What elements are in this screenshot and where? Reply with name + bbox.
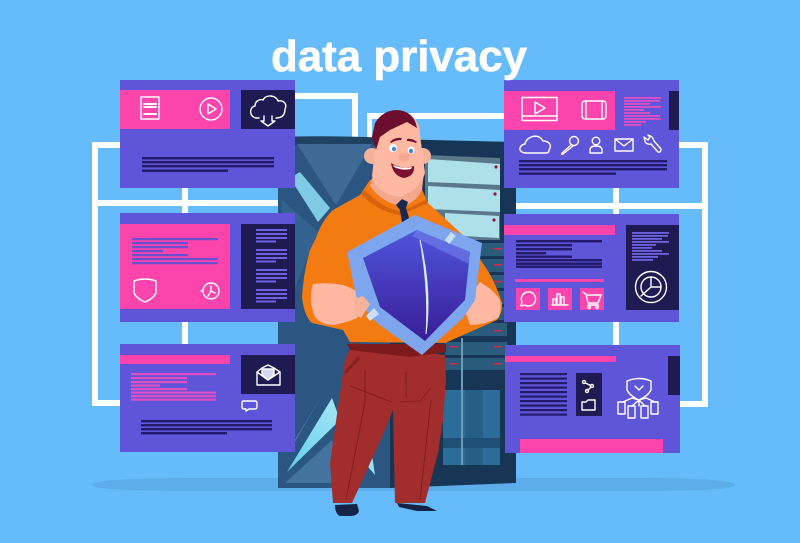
tie <box>396 199 409 223</box>
neck and jaw shadow <box>370 172 424 206</box>
icon tile: bar chart <box>548 288 572 310</box>
ground shadow <box>92 478 735 491</box>
left hand <box>311 283 368 325</box>
text lines dark <box>141 420 272 434</box>
man holding shield <box>302 110 502 516</box>
right hand <box>463 282 501 325</box>
text lines on dark <box>256 229 287 302</box>
text lines pink <box>131 373 216 401</box>
icon: shield <box>134 279 156 302</box>
thumb <box>354 296 370 318</box>
panel: cloud download <box>120 80 295 188</box>
icon: cloud download <box>251 96 286 126</box>
trousers <box>330 343 446 503</box>
icon: wrench <box>644 135 661 152</box>
text lines <box>142 157 274 172</box>
text lines on pink <box>132 238 218 264</box>
text lines pink <box>624 97 661 126</box>
icon: magnifier <box>562 136 578 154</box>
icon: mail <box>615 139 633 151</box>
shoes <box>335 503 437 516</box>
icon: tablet <box>582 101 606 119</box>
server right rack <box>390 139 516 488</box>
icon: document <box>141 97 159 119</box>
panel: mail <box>120 344 295 452</box>
ears <box>364 148 431 164</box>
text lines dark <box>516 240 602 268</box>
server rack <box>278 136 516 488</box>
icon: shield network <box>618 378 658 418</box>
title: data privacy <box>271 32 528 81</box>
icon box: share and folder <box>576 373 602 416</box>
panel: analytics <box>504 214 679 322</box>
icon: speech bubble <box>242 401 257 411</box>
eyebrows <box>390 138 417 143</box>
icon: clock <box>201 283 219 299</box>
icon: person <box>590 137 602 153</box>
eyes <box>389 144 414 154</box>
text lines dark <box>519 160 667 175</box>
icon tile: cart <box>580 288 604 310</box>
server left door <box>278 136 390 488</box>
pink divider <box>515 279 604 282</box>
panel: security network <box>505 345 680 453</box>
icon: pie chart <box>636 272 666 302</box>
panel: shield and clock <box>120 213 295 322</box>
face <box>372 113 425 197</box>
icon tile: chat <box>516 288 540 310</box>
mouth <box>391 163 414 178</box>
icon: cloud <box>520 136 550 153</box>
shield <box>347 215 482 355</box>
icon: video player <box>522 98 557 120</box>
torso <box>302 180 502 343</box>
text lines on dark <box>632 232 669 261</box>
text lines <box>520 373 567 416</box>
hair <box>372 110 417 150</box>
icon: play button <box>200 98 222 120</box>
panel: video and tools <box>504 80 679 188</box>
nose <box>398 152 410 162</box>
icon: open envelope <box>257 365 280 385</box>
collar <box>361 190 428 215</box>
